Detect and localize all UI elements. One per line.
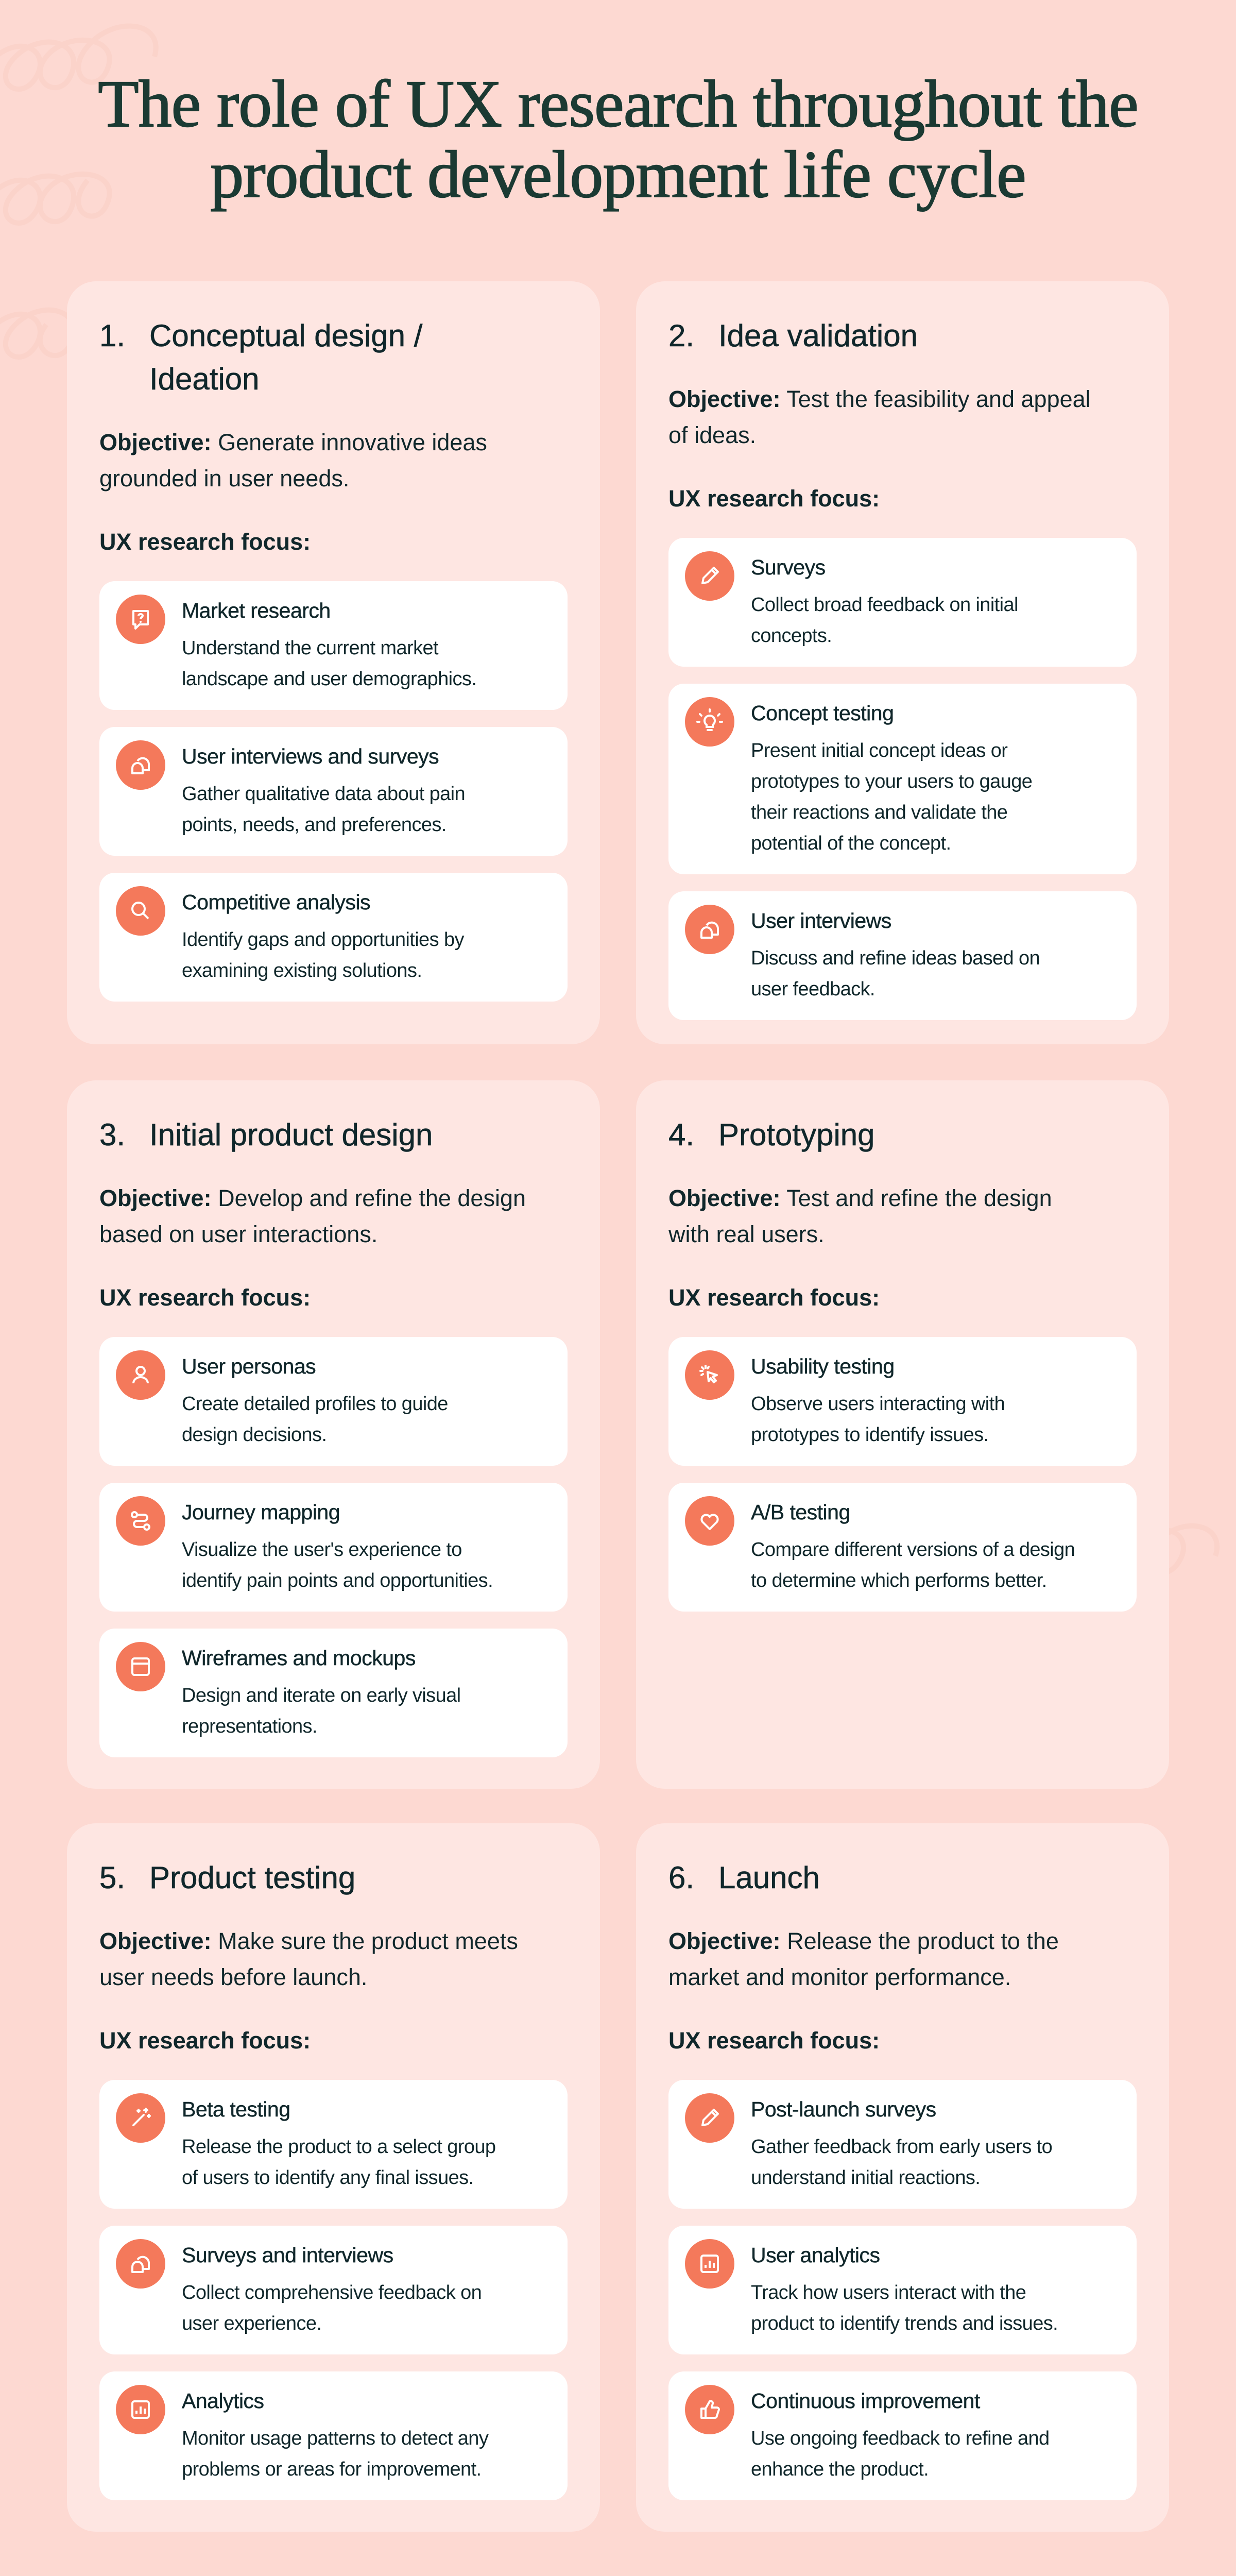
card: usability testing <box>668 1337 1137 1466</box>
focus label: UX research focus: <box>99 2027 311 2054</box>
objective <box>668 1185 1052 1247</box>
objective: with real users. <box>668 1221 825 1247</box>
objective: Objective: Develop and refine the design <box>99 1185 526 1211</box>
focus label: UX research focus: <box>668 2027 880 2054</box>
card: continuous improvement <box>668 2371 1137 2500</box>
card: beta testing: Release the product to a select group <box>182 2136 495 2158</box>
heading: 6. <box>668 1860 694 1895</box>
card: usability testing: Usability testing <box>751 1354 895 1378</box>
card: surveys and interviews <box>99 2226 568 2354</box>
card: analytics <box>99 2371 568 2500</box>
heading: Product testing <box>149 1860 355 1895</box>
card: beta testing: Beta testing <box>182 2097 290 2121</box>
card: competitive analysis <box>99 873 568 1002</box>
objective <box>99 1928 518 1990</box>
card: analytics: Monitor usage patterns to detect any <box>182 2428 488 2449</box>
objective <box>668 386 1091 448</box>
panel: 5 product testing <box>67 1823 600 2532</box>
objective <box>99 1185 526 1247</box>
card: surveys and interviews: Surveys and interviews <box>182 2243 393 2267</box>
card: surveys and interviews: Collect comprehensive feedback on <box>182 2282 482 2303</box>
card: surveys: Surveys <box>751 555 826 579</box>
card: wireframes: representations. <box>182 1716 317 1737</box>
focus label: UX research focus: <box>668 1284 880 1311</box>
card: a/b testing: Compare different versions of a design <box>751 1539 1075 1561</box>
card: beta testing <box>99 2080 568 2209</box>
card: user analytics: Track how users interact with the <box>751 2282 1026 2303</box>
card: interviews: points, needs, and preferences. <box>182 814 447 836</box>
objective: based on user interactions. <box>99 1221 377 1247</box>
focus label: UX research focus: <box>99 529 311 555</box>
objective: user needs before launch. <box>99 1964 367 1990</box>
card: surveys: concepts. <box>751 625 832 647</box>
card: personas: Create detailed profiles to guide <box>182 1393 448 1415</box>
card: journey mapping: identify pain points and opportunities. <box>182 1570 493 1591</box>
heading: Conceptual design / <box>149 318 422 353</box>
card: user analytics: product to identify trends and issues. <box>751 2313 1058 2334</box>
title: product development life cycle <box>210 138 1026 212</box>
card: market research <box>99 581 568 710</box>
heading: 2. <box>668 318 694 353</box>
card: journey mapping: Journey mapping <box>182 1500 340 1524</box>
card: user interviews <box>668 891 1137 1020</box>
card: interviews <box>99 727 568 856</box>
heading: 1. <box>99 318 125 353</box>
card: post-launch surveys: Post-launch surveys <box>751 2097 936 2121</box>
card: a/b testing: to determine which performs better. <box>751 1570 1047 1591</box>
card: surveys: Collect broad feedback on initial <box>751 594 1018 616</box>
objective: Objective: Test the feasibility and appeal <box>668 386 1091 412</box>
card: user analytics: User analytics <box>751 2243 880 2267</box>
card: a/b testing: A/B testing <box>751 1500 850 1524</box>
heading <box>668 1860 820 1895</box>
card: user interviews: User interviews <box>751 909 891 933</box>
panel: 1 conceptual design <box>67 281 600 1044</box>
card: continuous improvement: enhance the product. <box>751 2459 929 2480</box>
card: wireframes: Design and iterate on early visual <box>182 1685 460 1706</box>
heading: 5. <box>99 1860 125 1895</box>
card: concept testing <box>668 684 1137 874</box>
card: a/b testing <box>668 1483 1137 1612</box>
card: personas <box>99 1337 568 1466</box>
card: personas: User personas <box>182 1354 316 1378</box>
card: market research: landscape and user demographics. <box>182 668 476 690</box>
objective: Objective: Release the product to the <box>668 1928 1059 1954</box>
heading: 4. <box>668 1117 694 1152</box>
card: competitive analysis: Identify gaps and opportunities by <box>182 929 464 951</box>
card: surveys <box>668 538 1137 667</box>
objective: Objective: Make sure the product meets <box>99 1928 518 1954</box>
objective: market and monitor performance. <box>668 1964 1011 1990</box>
card: surveys and interviews: user experience. <box>182 2313 321 2334</box>
objective: grounded in user needs. <box>99 465 349 492</box>
heading: 3. <box>99 1117 125 1152</box>
heading: Launch <box>718 1860 820 1895</box>
panel: 4 prototyping <box>636 1080 1169 1789</box>
objective: Objective: Generate innovative ideas <box>99 429 487 455</box>
title <box>98 67 1138 212</box>
card: journey mapping: Visualize the user's experience to <box>182 1539 462 1561</box>
card: competitive analysis: examining existing solutions. <box>182 960 422 981</box>
card: continuous improvement: Continuous improvement <box>751 2389 980 2413</box>
panel: 2 idea validation <box>636 281 1169 1044</box>
panel: 6 launch <box>636 1823 1169 2532</box>
card: wireframes <box>99 1629 568 1757</box>
card: beta testing: of users to identify any final issues. <box>182 2167 474 2189</box>
card: analytics: Analytics <box>182 2389 264 2413</box>
objective: of ideas. <box>668 422 756 448</box>
card: analytics: problems or areas for improvement. <box>182 2459 481 2480</box>
card: post-launch surveys: understand initial reactions. <box>751 2167 980 2189</box>
card: continuous improvement: Use ongoing feedback to refine and <box>751 2428 1050 2449</box>
card: concept testing: prototypes to your users to gauge <box>751 771 1032 792</box>
card: user interviews: Discuss and refine ideas based on <box>751 947 1040 969</box>
heading: Prototyping <box>718 1117 875 1152</box>
card: post-launch surveys: Gather feedback from early users to <box>751 2136 1052 2158</box>
card: concept testing: their reactions and validate the <box>751 802 1007 823</box>
card: concept testing: potential of the concept. <box>751 833 951 854</box>
card: concept testing: Present initial concept ideas or <box>751 740 1007 761</box>
card: post-launch surveys <box>668 2080 1137 2209</box>
card: usability testing: Observe users interacting with <box>751 1393 1005 1415</box>
focus label: UX research focus: <box>99 1284 311 1311</box>
card: concept testing: Concept testing <box>751 701 894 725</box>
focus label: UX research focus: <box>668 485 880 512</box>
objective <box>99 429 487 492</box>
card: wireframes: Wireframes and mockups <box>182 1646 416 1670</box>
panel: 3 initial product design <box>67 1080 600 1789</box>
card: market research: Market research <box>182 599 331 622</box>
card: interviews: User interviews and surveys <box>182 744 439 768</box>
heading: Initial product design <box>149 1117 433 1152</box>
card: user analytics <box>668 2226 1137 2354</box>
heading: Idea validation <box>718 318 918 353</box>
card: interviews: Gather qualitative data about pain <box>182 783 465 805</box>
heading <box>99 318 423 396</box>
objective <box>668 1928 1059 1990</box>
card: personas: design decisions. <box>182 1424 327 1446</box>
objective: Objective: Test and refine the design <box>668 1185 1052 1211</box>
card: usability testing: prototypes to identify issues. <box>751 1424 988 1446</box>
title: The role of UX research throughout the <box>98 67 1138 141</box>
card: user interviews: user feedback. <box>751 978 875 1000</box>
heading: Ideation <box>149 362 260 396</box>
card: market research: Understand the current market <box>182 637 438 659</box>
card: journey mapping <box>99 1483 568 1612</box>
card: competitive analysis: Competitive analysis <box>182 890 370 914</box>
